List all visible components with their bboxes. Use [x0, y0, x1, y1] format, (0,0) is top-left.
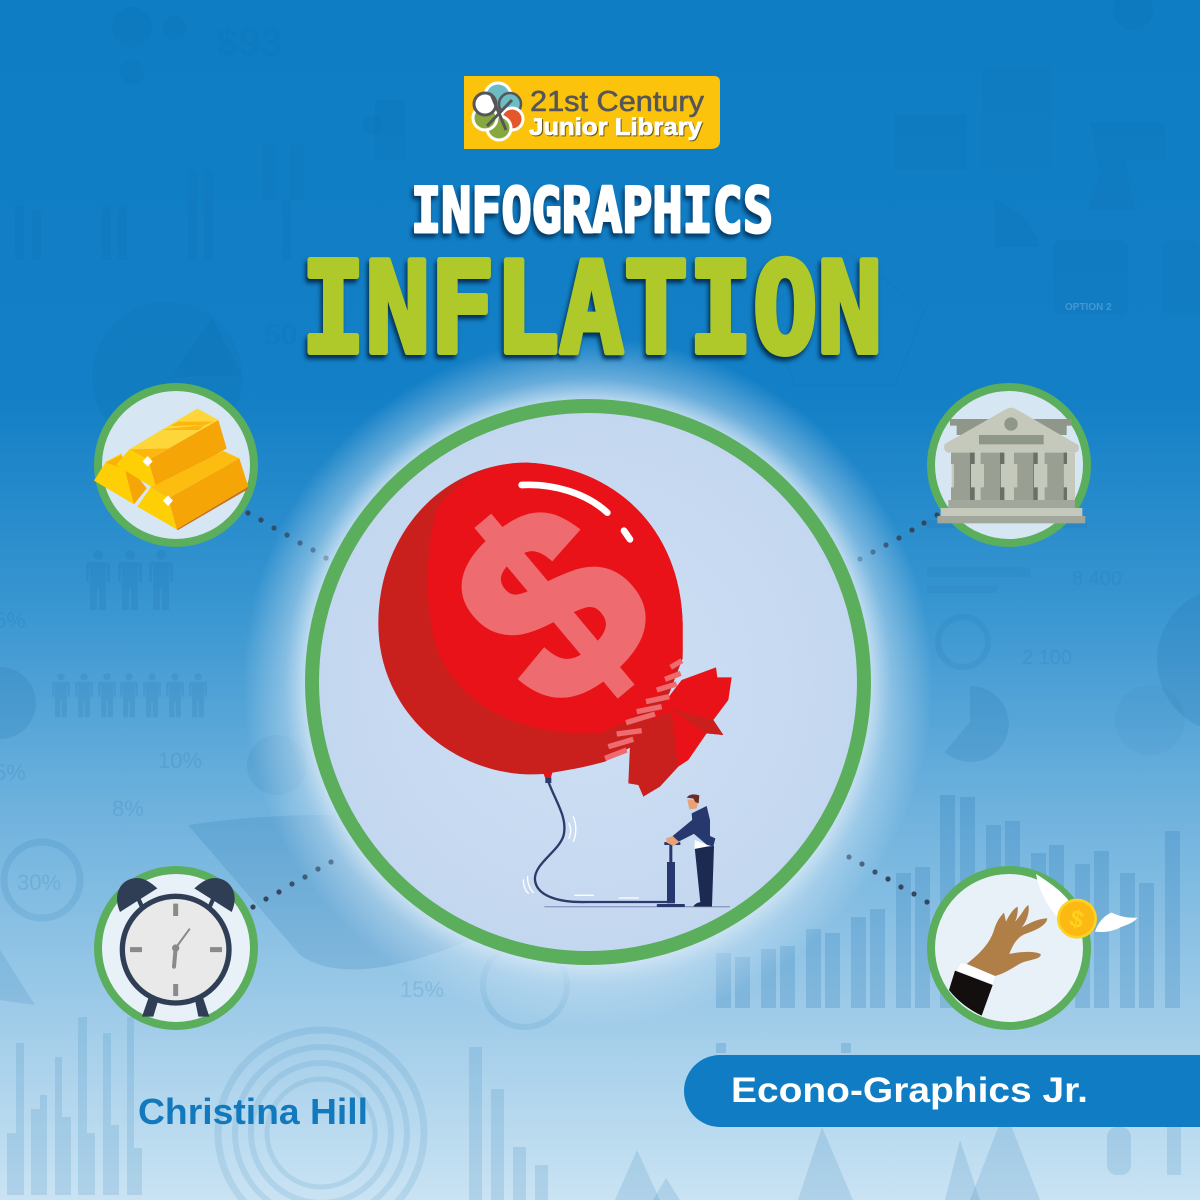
halo behind central circle — [243, 337, 933, 1027]
dotted connector: bank — [857, 512, 940, 562]
balloon body — [378, 463, 683, 774]
clock face — [122, 896, 229, 1003]
author name: Christina Hill — [138, 1091, 368, 1132]
faded background elements: middle area: 15% — [400, 977, 444, 1002]
balloon illustration — [378, 445, 732, 907]
icon circle: gold bars — [94, 387, 254, 543]
pediment — [944, 408, 1079, 453]
icon circle: hand and flying coin — [931, 870, 1138, 1026]
faded background elements: upper area: OPTION 2 — [1065, 302, 1112, 313]
dollar sign: $ — [401, 445, 703, 764]
coin — [1058, 900, 1096, 937]
sparkles — [143, 456, 173, 506]
rope tie — [605, 661, 682, 758]
faded background elements: middle area: 2 100 — [1022, 647, 1072, 669]
clock hands — [174, 929, 189, 967]
businessman — [666, 794, 715, 907]
series banner — [684, 1055, 1200, 1127]
balloon knot — [543, 772, 553, 778]
icon circle: bank — [931, 387, 1087, 543]
nozzle — [545, 778, 551, 783]
shirt cuff — [957, 963, 995, 984]
balloon lit surface — [428, 463, 683, 734]
balloon tail: dark folds — [628, 708, 723, 797]
series title: Econo-Graphics Jr. — [731, 1071, 1088, 1110]
faded background elements: middle area: 10% — [158, 748, 202, 773]
top bar — [116, 408, 227, 490]
balloon tail: bright — [653, 667, 732, 767]
icon circle: hand and flying coin: $ — [1067, 905, 1087, 935]
icon: logo flower — [473, 83, 523, 140]
clock legs — [142, 998, 209, 1017]
floor pump — [657, 842, 685, 907]
lower bar — [137, 451, 248, 530]
central circle — [312, 406, 864, 958]
faded background elements: middle area: 8% — [112, 796, 144, 821]
logo text line two: Junior Library — [529, 114, 703, 141]
dotted connector: coin — [846, 854, 930, 905]
clock ticks — [130, 904, 222, 996]
logo badge — [464, 76, 720, 149]
balloon highlights — [522, 485, 630, 539]
left wing — [1036, 874, 1068, 917]
suit sleeve — [949, 971, 993, 1016]
steps — [948, 500, 1075, 508]
faded background elements: middle area: 30% — [17, 870, 61, 895]
heading: infographics: INFOGRAPHICS — [411, 174, 773, 247]
dotted connector: gold — [245, 510, 329, 561]
faded background elements: upper area — [15, 0, 1200, 452]
faded background elements: upper area: $93 — [216, 21, 283, 65]
hand — [967, 905, 1047, 976]
faded background elements: upper area: 50 — [264, 319, 297, 352]
motion marks — [523, 817, 638, 898]
heading: inflation: INFLATION — [301, 235, 882, 382]
back bar — [94, 453, 147, 504]
dotted connector: clock — [250, 859, 334, 910]
columns — [951, 453, 1075, 501]
faded bar chart bottom right — [716, 795, 1180, 1053]
air hose — [535, 782, 670, 902]
logo text line one: 21st Century — [530, 86, 705, 118]
faded charts bottom left and centre — [0, 943, 1181, 1200]
icon circle: alarm clock — [98, 870, 254, 1026]
clock bells — [117, 878, 235, 912]
ground line — [544, 905, 730, 909]
right wing — [1095, 913, 1138, 932]
faded background elements: middle area — [0, 520, 1200, 1002]
back roof — [950, 419, 1072, 435]
faded background elements: middle area: 8 400 — [1072, 568, 1122, 590]
